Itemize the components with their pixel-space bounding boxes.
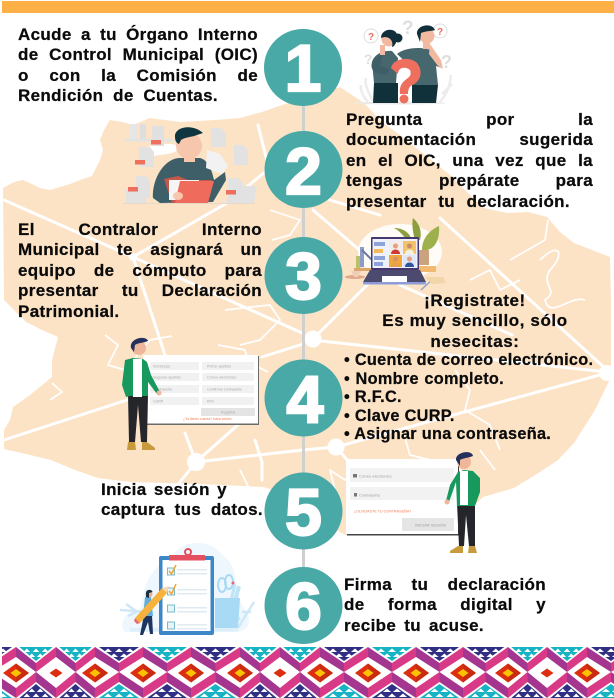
illustration: man with registration form: Segundo apellido xyxy=(153,376,181,380)
district boundaries xyxy=(50,210,585,490)
step 5 badge xyxy=(264,472,342,550)
top orange bar xyxy=(2,1,614,13)
illustration: couple with question marks xyxy=(354,18,452,104)
leaves xyxy=(120,602,254,628)
step 3 badge: 3 xyxy=(285,239,322,313)
illustration: man with login form: ¿OLVIDASTE TU CONTRASEÑA? xyxy=(354,508,411,514)
illustration: man with registration form: Primer apellido xyxy=(207,364,231,368)
illustration: man with login form: Contraseña xyxy=(359,492,380,498)
man xyxy=(412,85,438,103)
laptop screen xyxy=(371,237,419,270)
man with pencil xyxy=(140,615,153,635)
background map of the state xyxy=(3,87,614,535)
text: step 1: o con la Comisión de xyxy=(18,66,258,85)
text: step 1: Acude a tu Órgano Interno xyxy=(18,25,258,44)
road junctions xyxy=(129,253,614,471)
illustration: couple with question marks: ? xyxy=(364,51,373,67)
illustration: laptop video call xyxy=(345,218,446,290)
white lake in the north xyxy=(142,144,178,156)
text: step 6: de forma digital y xyxy=(344,595,546,614)
text: step 4 heading: ¡Registrate! xyxy=(424,291,526,310)
text: step 4 requirements list: • Cuenta de correo electrónico. xyxy=(344,351,593,369)
illustration: man with documents xyxy=(123,124,257,204)
illustration: man with login form: Correo electrónico xyxy=(359,474,392,478)
text: step 6: recibe tu acuse. xyxy=(344,616,484,635)
road network xyxy=(4,125,607,497)
text: step 3: Patrimonial. xyxy=(18,302,120,321)
illustration: man with registration form xyxy=(122,338,259,450)
login panel xyxy=(347,461,459,536)
footer woven pattern band xyxy=(0,647,614,698)
text: step 3: presentar tu Declaración xyxy=(18,281,262,300)
step 1 badge xyxy=(264,29,342,106)
text: step 2: tengas prepárate para xyxy=(346,171,593,190)
illustration: man with registration form: ¿Ya tienes cuenta? Inicia sesión xyxy=(183,417,232,421)
grey documents xyxy=(126,128,257,203)
text: step 1: Rendición de Cuentas. xyxy=(18,86,218,105)
step 2 badge: 2 xyxy=(285,134,322,208)
woman xyxy=(373,83,398,103)
step 2 badge xyxy=(264,131,342,208)
text: step 4 heading xyxy=(382,291,568,351)
text: step 4 requirements list: • Nombre completo. xyxy=(344,370,504,388)
text: step 5: captura tus datos. xyxy=(101,500,263,519)
text: step 2: presentar tu declaración. xyxy=(346,192,570,211)
illustration: couple with question marks: ? xyxy=(441,52,452,72)
step 6 badge xyxy=(264,567,342,644)
text: step 2: Pregunta por la xyxy=(346,110,593,129)
illustration: man with registration form: RFC xyxy=(207,400,215,404)
question mark xyxy=(391,59,421,94)
illustration: man with registration form: Nombre(s) xyxy=(153,364,170,368)
text: step 4 heading: Es muy sencillo, sólo xyxy=(382,311,568,330)
step 6 badge: 6 xyxy=(285,569,322,643)
timeline vertical line xyxy=(302,100,305,570)
step 1 badge: 1 xyxy=(285,31,321,105)
text: step 4 requirements list: • Clave CURP. xyxy=(344,407,455,425)
illustration: man with registration form: Correo electrónico xyxy=(207,376,236,380)
red file tags xyxy=(128,140,236,194)
text: step 4 requirements list xyxy=(344,351,593,443)
illustration: man with login form xyxy=(346,452,480,553)
text: step 6 xyxy=(344,575,546,635)
text: step 5 xyxy=(101,480,263,519)
text: step 3: El Contralor Interno xyxy=(18,220,262,239)
illustration: couple with question marks: ? xyxy=(402,18,414,39)
text: step 3: Municipal te asignará un xyxy=(18,240,262,259)
illustration: man with registration form: CURP xyxy=(153,400,164,404)
registration panel xyxy=(144,356,259,425)
illustration: checklist with giant pencil xyxy=(120,543,254,635)
illustration: man with registration form: Registrar xyxy=(221,410,236,414)
illustration: man with registration form: Contraseña xyxy=(153,388,172,392)
text: step 1: de Control Municipal (OIC) xyxy=(18,45,258,64)
illustration: man with login form: INICIAR SESIÓN xyxy=(415,522,446,528)
text: step 2: documentación sugerida xyxy=(346,130,593,149)
text: step 6: Firma tu declaración xyxy=(344,575,546,594)
text: step 3: equipo de cómputo para xyxy=(18,261,262,280)
text: step 4 heading: nesecitas: xyxy=(430,332,520,351)
text: step 4 requirements list: • R.F.C. xyxy=(344,388,402,406)
illustration: man with registration form: Confirmar contraseña xyxy=(207,388,242,392)
illustration: couple with question marks: ? xyxy=(437,27,443,38)
laptop base xyxy=(363,270,426,282)
step 4 badge xyxy=(264,360,342,436)
man torso xyxy=(153,158,226,203)
step 3 badge xyxy=(264,237,342,314)
text: step 2: en el OIC, una vez que la xyxy=(346,151,593,170)
illustration: couple with question marks: ? xyxy=(368,32,374,43)
man in green jacket xyxy=(128,395,148,442)
clipboard xyxy=(159,556,214,635)
checklist rows xyxy=(177,569,207,630)
step 4 badge: 4 xyxy=(287,362,324,436)
text: step 1 xyxy=(18,24,258,105)
text: step 4 requirements list: • Asignar una contraseña. xyxy=(344,425,551,443)
cup with scissors and pens xyxy=(218,575,233,592)
folder xyxy=(164,176,212,203)
man in green jacket xyxy=(457,503,475,546)
step 5 badge: 5 xyxy=(285,475,322,549)
text: step 5: Inicia sesión y xyxy=(101,480,227,499)
text: step 2 xyxy=(346,110,593,211)
text: step 3 xyxy=(18,220,262,321)
